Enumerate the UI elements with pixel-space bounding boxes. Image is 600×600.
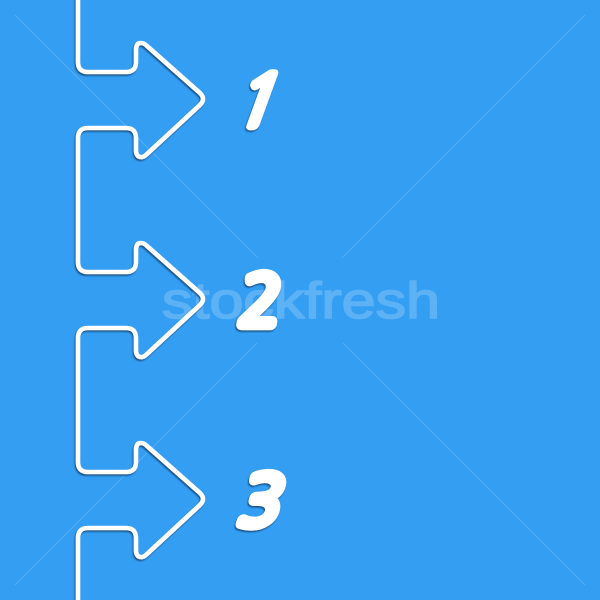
number 1: 1 bbox=[225, 65, 294, 137]
watermark text: stockfresh bbox=[162, 272, 440, 329]
number 2: 2 bbox=[236, 267, 286, 335]
connected arrow outline bbox=[78, 0, 203, 600]
number 3: 3 bbox=[234, 467, 292, 535]
